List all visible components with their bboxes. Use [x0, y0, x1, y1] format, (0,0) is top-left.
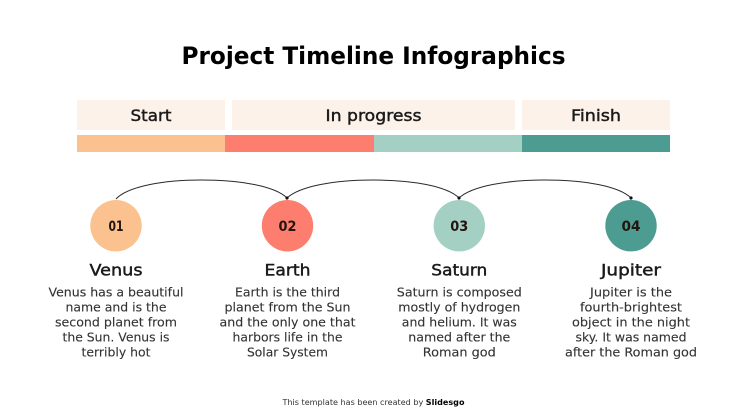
description: Jupiter: object in the night — [572, 316, 690, 330]
heading: Saturn: Saturn — [431, 260, 487, 280]
description: Saturn: Saturn is composed — [397, 286, 522, 300]
description: Earth: and the only one that — [220, 316, 356, 330]
phase: finish — [522, 100, 670, 130]
number circle 02: 02 — [278, 219, 296, 235]
description: Jupiter — [565, 286, 697, 360]
number circle 03 — [434, 200, 485, 251]
heading: Jupiter: Jupiter — [600, 260, 661, 280]
progress bar — [77, 135, 670, 152]
step 02: Earth — [220, 200, 356, 360]
phase: start: Start — [130, 106, 172, 125]
description: Venus: Venus has a beautiful — [48, 286, 184, 300]
number circle 04 — [605, 200, 657, 251]
phase: in progress — [232, 100, 515, 130]
description: Earth: Earth is the third — [235, 286, 340, 300]
description: Venus: second planet from — [55, 316, 177, 330]
description: Jupiter: after the Roman god — [565, 346, 697, 360]
phase header row — [77, 100, 670, 130]
step 04: Jupiter — [565, 200, 697, 360]
connector arcs — [116, 180, 633, 200]
number circle 04: 04 — [622, 219, 641, 235]
phase: start — [77, 100, 225, 130]
step 01: Venus — [48, 200, 184, 360]
description: Saturn: and helium. It was — [402, 316, 517, 330]
description: Venus: terribly hot — [82, 346, 151, 360]
description: Earth: Solar System — [247, 346, 328, 360]
phase: in progress: In progress — [326, 106, 422, 125]
description: Saturn: named after the — [408, 330, 510, 344]
description: Venus: name and is the — [66, 300, 166, 314]
description: Jupiter: fourth-brightest — [580, 300, 682, 314]
heading: Earth: Earth — [264, 260, 310, 280]
number circle 01: 01 — [108, 219, 124, 235]
description: Jupiter: sky. It was named — [576, 330, 686, 344]
footer credit: This template has been created by Slidesgo — [281, 398, 465, 407]
step 03: Saturn — [397, 200, 522, 360]
title: Project Timeline Infographics — [182, 42, 566, 70]
description: Venus — [48, 286, 184, 360]
number circle 01 — [90, 200, 142, 251]
description: Venus: the Sun. Venus is — [62, 330, 170, 344]
phase: finish: Finish — [571, 106, 621, 125]
number circle 03: 03 — [450, 219, 468, 235]
description: Saturn: Roman god — [423, 346, 496, 360]
description: Saturn — [397, 286, 522, 360]
description: Jupiter: Jupiter is the — [589, 286, 672, 300]
heading: Venus: Venus — [90, 260, 142, 280]
number circle 02 — [262, 200, 313, 251]
description: Earth: harbors life in the — [232, 330, 342, 344]
description: Earth — [220, 286, 356, 360]
description: Earth: planet from the Sun — [224, 300, 350, 314]
description: Saturn: mostly of hydrogen — [398, 300, 520, 314]
